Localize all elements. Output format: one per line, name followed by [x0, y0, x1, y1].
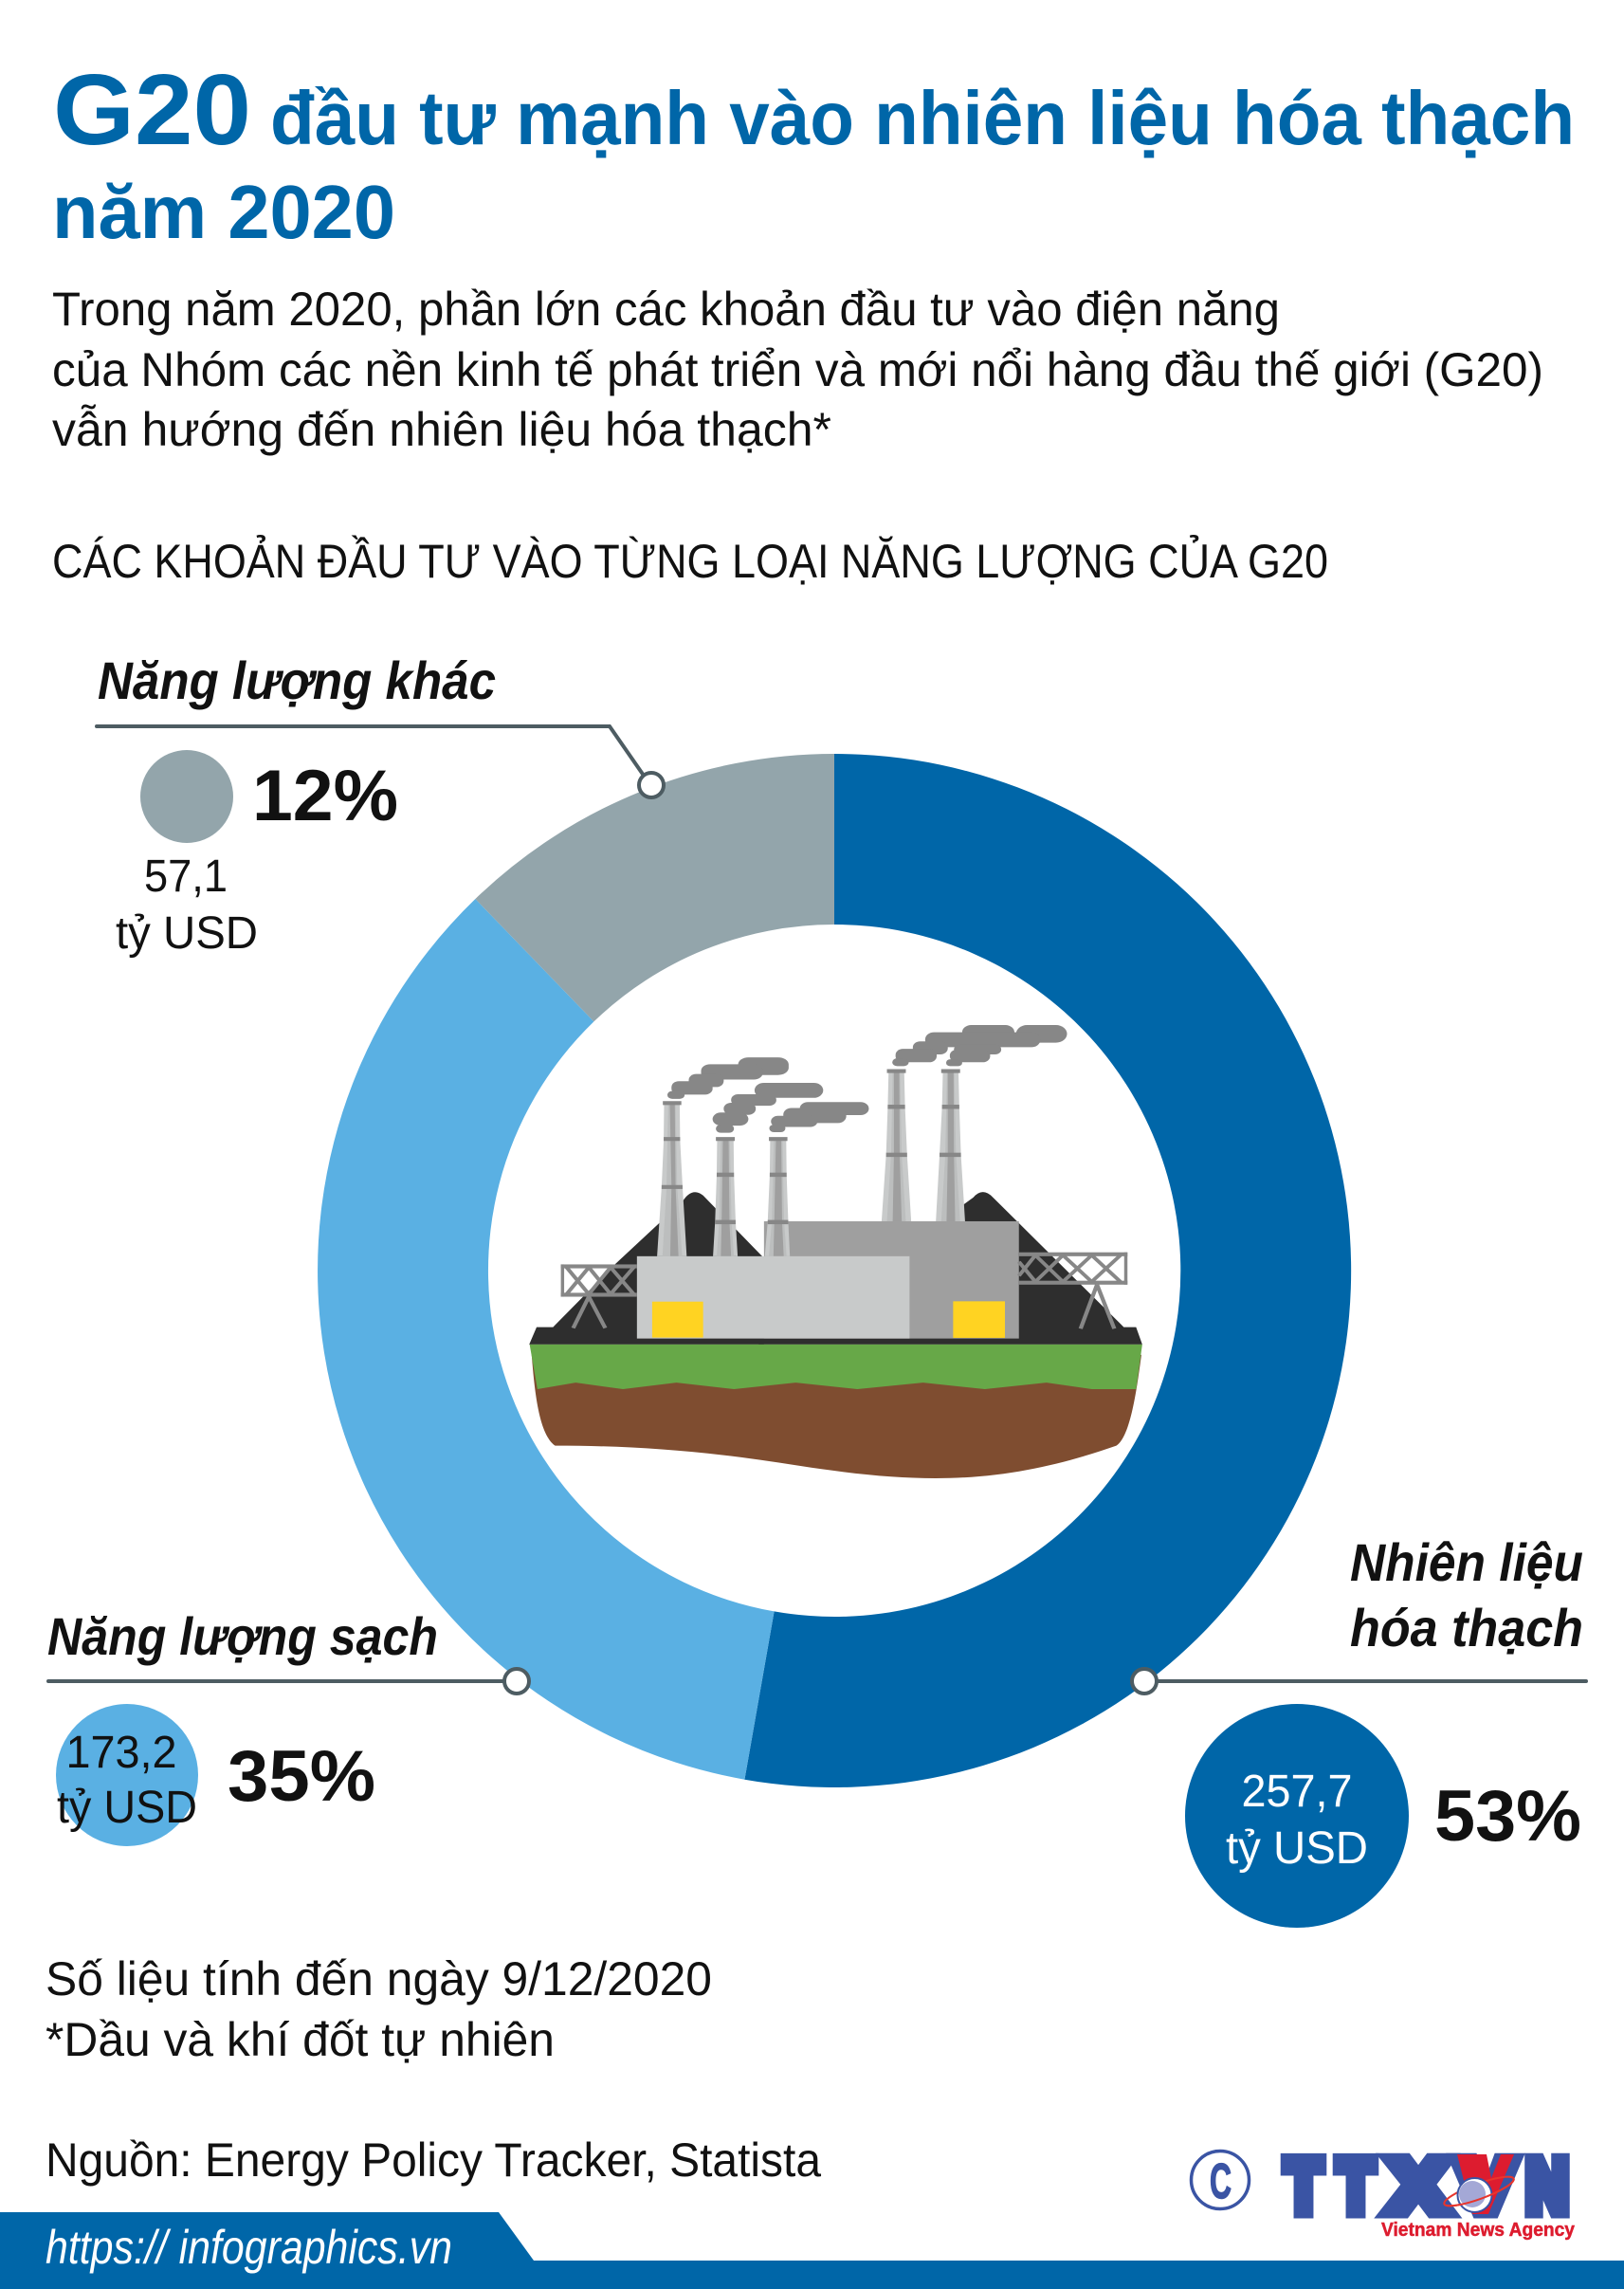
footnotes: Số liệu tính đến ngày 9/12/2020 — [46, 1952, 712, 2005]
callout: other energy — [97, 650, 664, 959]
title — [52, 54, 1575, 254]
left coal pile — [529, 1192, 764, 1345]
segment: other energy 12% — [475, 754, 834, 1021]
leader dot — [1132, 1669, 1157, 1694]
logo: TTXVN: X — [1389, 2144, 1448, 2227]
logo: TTXVN: T — [1338, 2144, 1374, 2227]
smoke plumes — [667, 1025, 1067, 1133]
yellow doors — [652, 1301, 1005, 1338]
icon: coal power plant — [529, 1025, 1142, 1478]
amount: 257,7 — [1242, 1767, 1352, 1817]
logo: TTXVN — [1286, 2144, 1576, 2241]
right coal pile — [758, 1192, 1142, 1345]
callout: fossil fuels: hóa thạch — [1350, 1598, 1583, 1657]
logo red V — [1457, 2154, 1514, 2214]
title: đầu tư mạnh vào nhiên liệu hóa thạch — [270, 76, 1575, 160]
callout: fossil fuels — [1132, 1532, 1586, 1928]
logo: TTXVN: V — [1457, 2144, 1514, 2227]
callout: other energy: tỷ USD — [116, 908, 258, 959]
label: Năng lượng khác — [98, 650, 496, 710]
rear chimneys — [882, 1069, 965, 1221]
leader line — [48, 1679, 517, 1683]
footnotes: *Dầu và khí đốt tự nhiên — [46, 2013, 555, 2066]
ground: soil — [532, 1355, 1141, 1478]
leader dot — [639, 773, 664, 797]
intro text: vẫn hướng đến nhiên liệu hóa thạch* — [52, 403, 831, 456]
footnotes — [46, 1952, 712, 2066]
intro text — [52, 283, 1543, 456]
leader line — [97, 726, 650, 785]
title: năm 2020 — [52, 170, 395, 254]
intro text: Trong năm 2020, phần lớn các khoản đầu tư vào điện năng — [52, 283, 1280, 336]
title: G20 — [53, 54, 251, 166]
logo: TTXVN: N — [1526, 2144, 1568, 2227]
leader line — [1144, 1679, 1586, 1683]
label: Năng lượng sạch — [47, 1606, 438, 1666]
logo globe — [1442, 2171, 1516, 2212]
callout: clean energy: tỷ USD — [57, 1783, 197, 1833]
amount: 57,1 — [144, 852, 228, 902]
left conveyor truss — [561, 1264, 637, 1328]
website url: https:// infographics.vn — [46, 2221, 452, 2274]
front chimneys — [657, 1101, 790, 1256]
value circle — [1185, 1704, 1409, 1928]
intro text: của Nhóm các nền kinh tế phát triển và mới nổi hàng đầu thế giới (G20) — [52, 343, 1543, 396]
value circle — [56, 1704, 198, 1846]
footer bar — [0, 2212, 1624, 2289]
donut chart — [318, 754, 1351, 1787]
label: Nhiên liệu — [1350, 1532, 1583, 1592]
leader dot — [504, 1669, 529, 1694]
percent: 35% — [228, 1736, 375, 1817]
percent: 53% — [1434, 1776, 1581, 1857]
icon: copyright — [1191, 2151, 1250, 2209]
source: Nguồn: Energy Policy Tracker, Statista — [46, 2133, 821, 2187]
right conveyor truss — [1019, 1253, 1127, 1328]
logo: TTXVN: T — [1286, 2144, 1322, 2227]
callout: clean energy — [47, 1606, 529, 1846]
segment: fossil fuels 53% — [744, 754, 1351, 1787]
percent: 12% — [252, 756, 398, 836]
amount: 173,2 — [66, 1728, 176, 1778]
rear building — [764, 1221, 1019, 1339]
chart heading: CÁC KHOẢN ĐẦU TƯ VÀO TỪNG LOẠI NĂNG LƯỢNG CỦA G20 — [52, 534, 1328, 588]
callout: fossil fuels: tỷ USD — [1226, 1823, 1368, 1874]
value circle — [140, 750, 233, 843]
ground: grass — [530, 1345, 1142, 1389]
icon: copyright: C — [1210, 2154, 1232, 2209]
front building — [637, 1256, 909, 1339]
logo tagline: Vietnam News Agency — [1381, 2220, 1576, 2241]
segment: clean energy 35% — [318, 899, 775, 1780]
